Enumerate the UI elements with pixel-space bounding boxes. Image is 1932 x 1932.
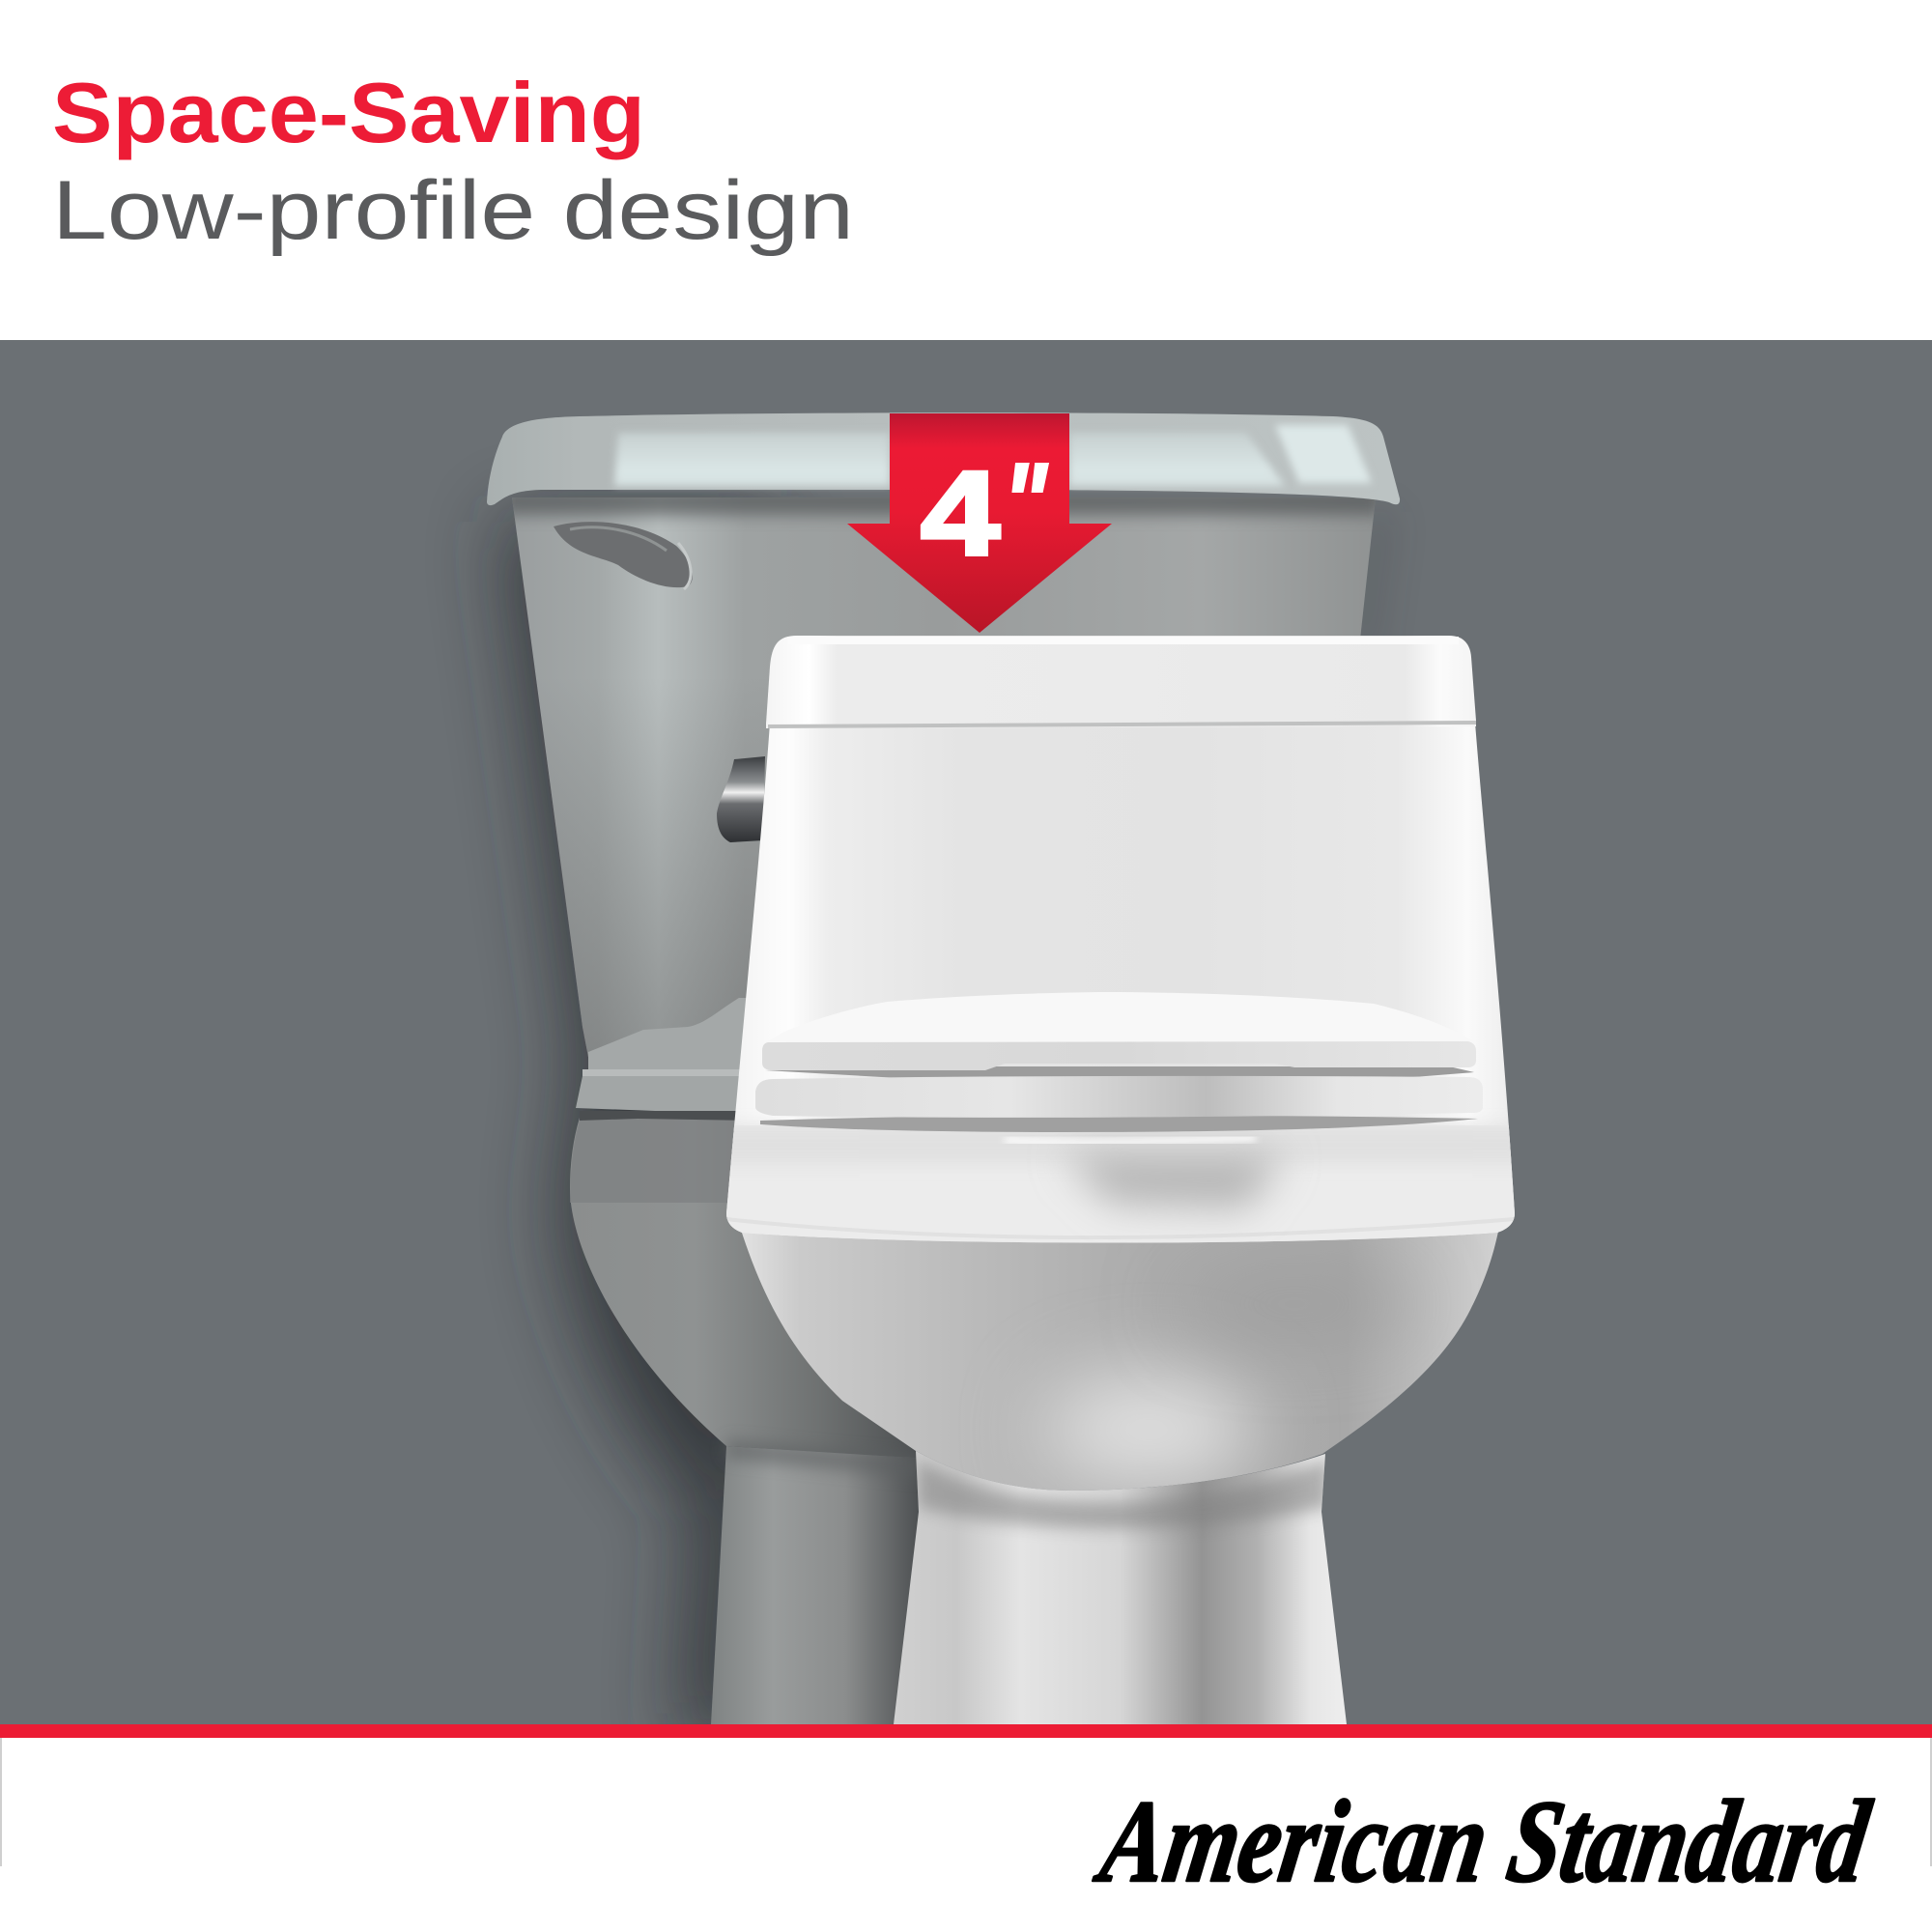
front stem — [894, 1451, 1347, 1724]
red divider bar — [0, 1724, 1932, 1738]
icon: chrome front handle — [717, 756, 765, 842]
label: 4 inches: " — [1003, 440, 1049, 565]
front tank body and rim — [715, 720, 1526, 1251]
rear tank body — [512, 497, 1376, 1072]
rear stem — [711, 1446, 927, 1724]
arrow: 4 inch height difference — [847, 413, 1112, 633]
dark gap under rear ring — [580, 1111, 753, 1121]
seat ring — [755, 1076, 1483, 1118]
rear tank lid — [487, 412, 1400, 505]
rear seat lid — [588, 998, 773, 1069]
rear seat ring — [576, 1076, 773, 1111]
gap below seat lid — [765, 1066, 1474, 1082]
label: 4 inches — [921, 440, 1049, 581]
panel: gray wall — [0, 340, 1932, 1724]
title block — [52, 65, 854, 257]
label: 4 inches: 4 — [921, 447, 1000, 581]
footer edge lines — [1, 1738, 1931, 1866]
seat lid — [762, 992, 1476, 1070]
shadow under rear lid — [502, 488, 1381, 515]
rear taller toilet — [487, 412, 1400, 1724]
wall shadow behind rear toilet — [502, 512, 1391, 1739]
front low-profile toilet — [715, 636, 1526, 1729]
front bowl — [742, 1233, 1498, 1491]
icon: rear tank handle — [554, 522, 693, 589]
heading: Space-Saving: Space-Saving — [52, 65, 645, 160]
subheading: Low-profile design: Low-profile design — [52, 164, 854, 257]
rear bowl — [570, 1114, 927, 1459]
front tank lid — [766, 636, 1476, 728]
gap below seat ring — [760, 1115, 1478, 1132]
